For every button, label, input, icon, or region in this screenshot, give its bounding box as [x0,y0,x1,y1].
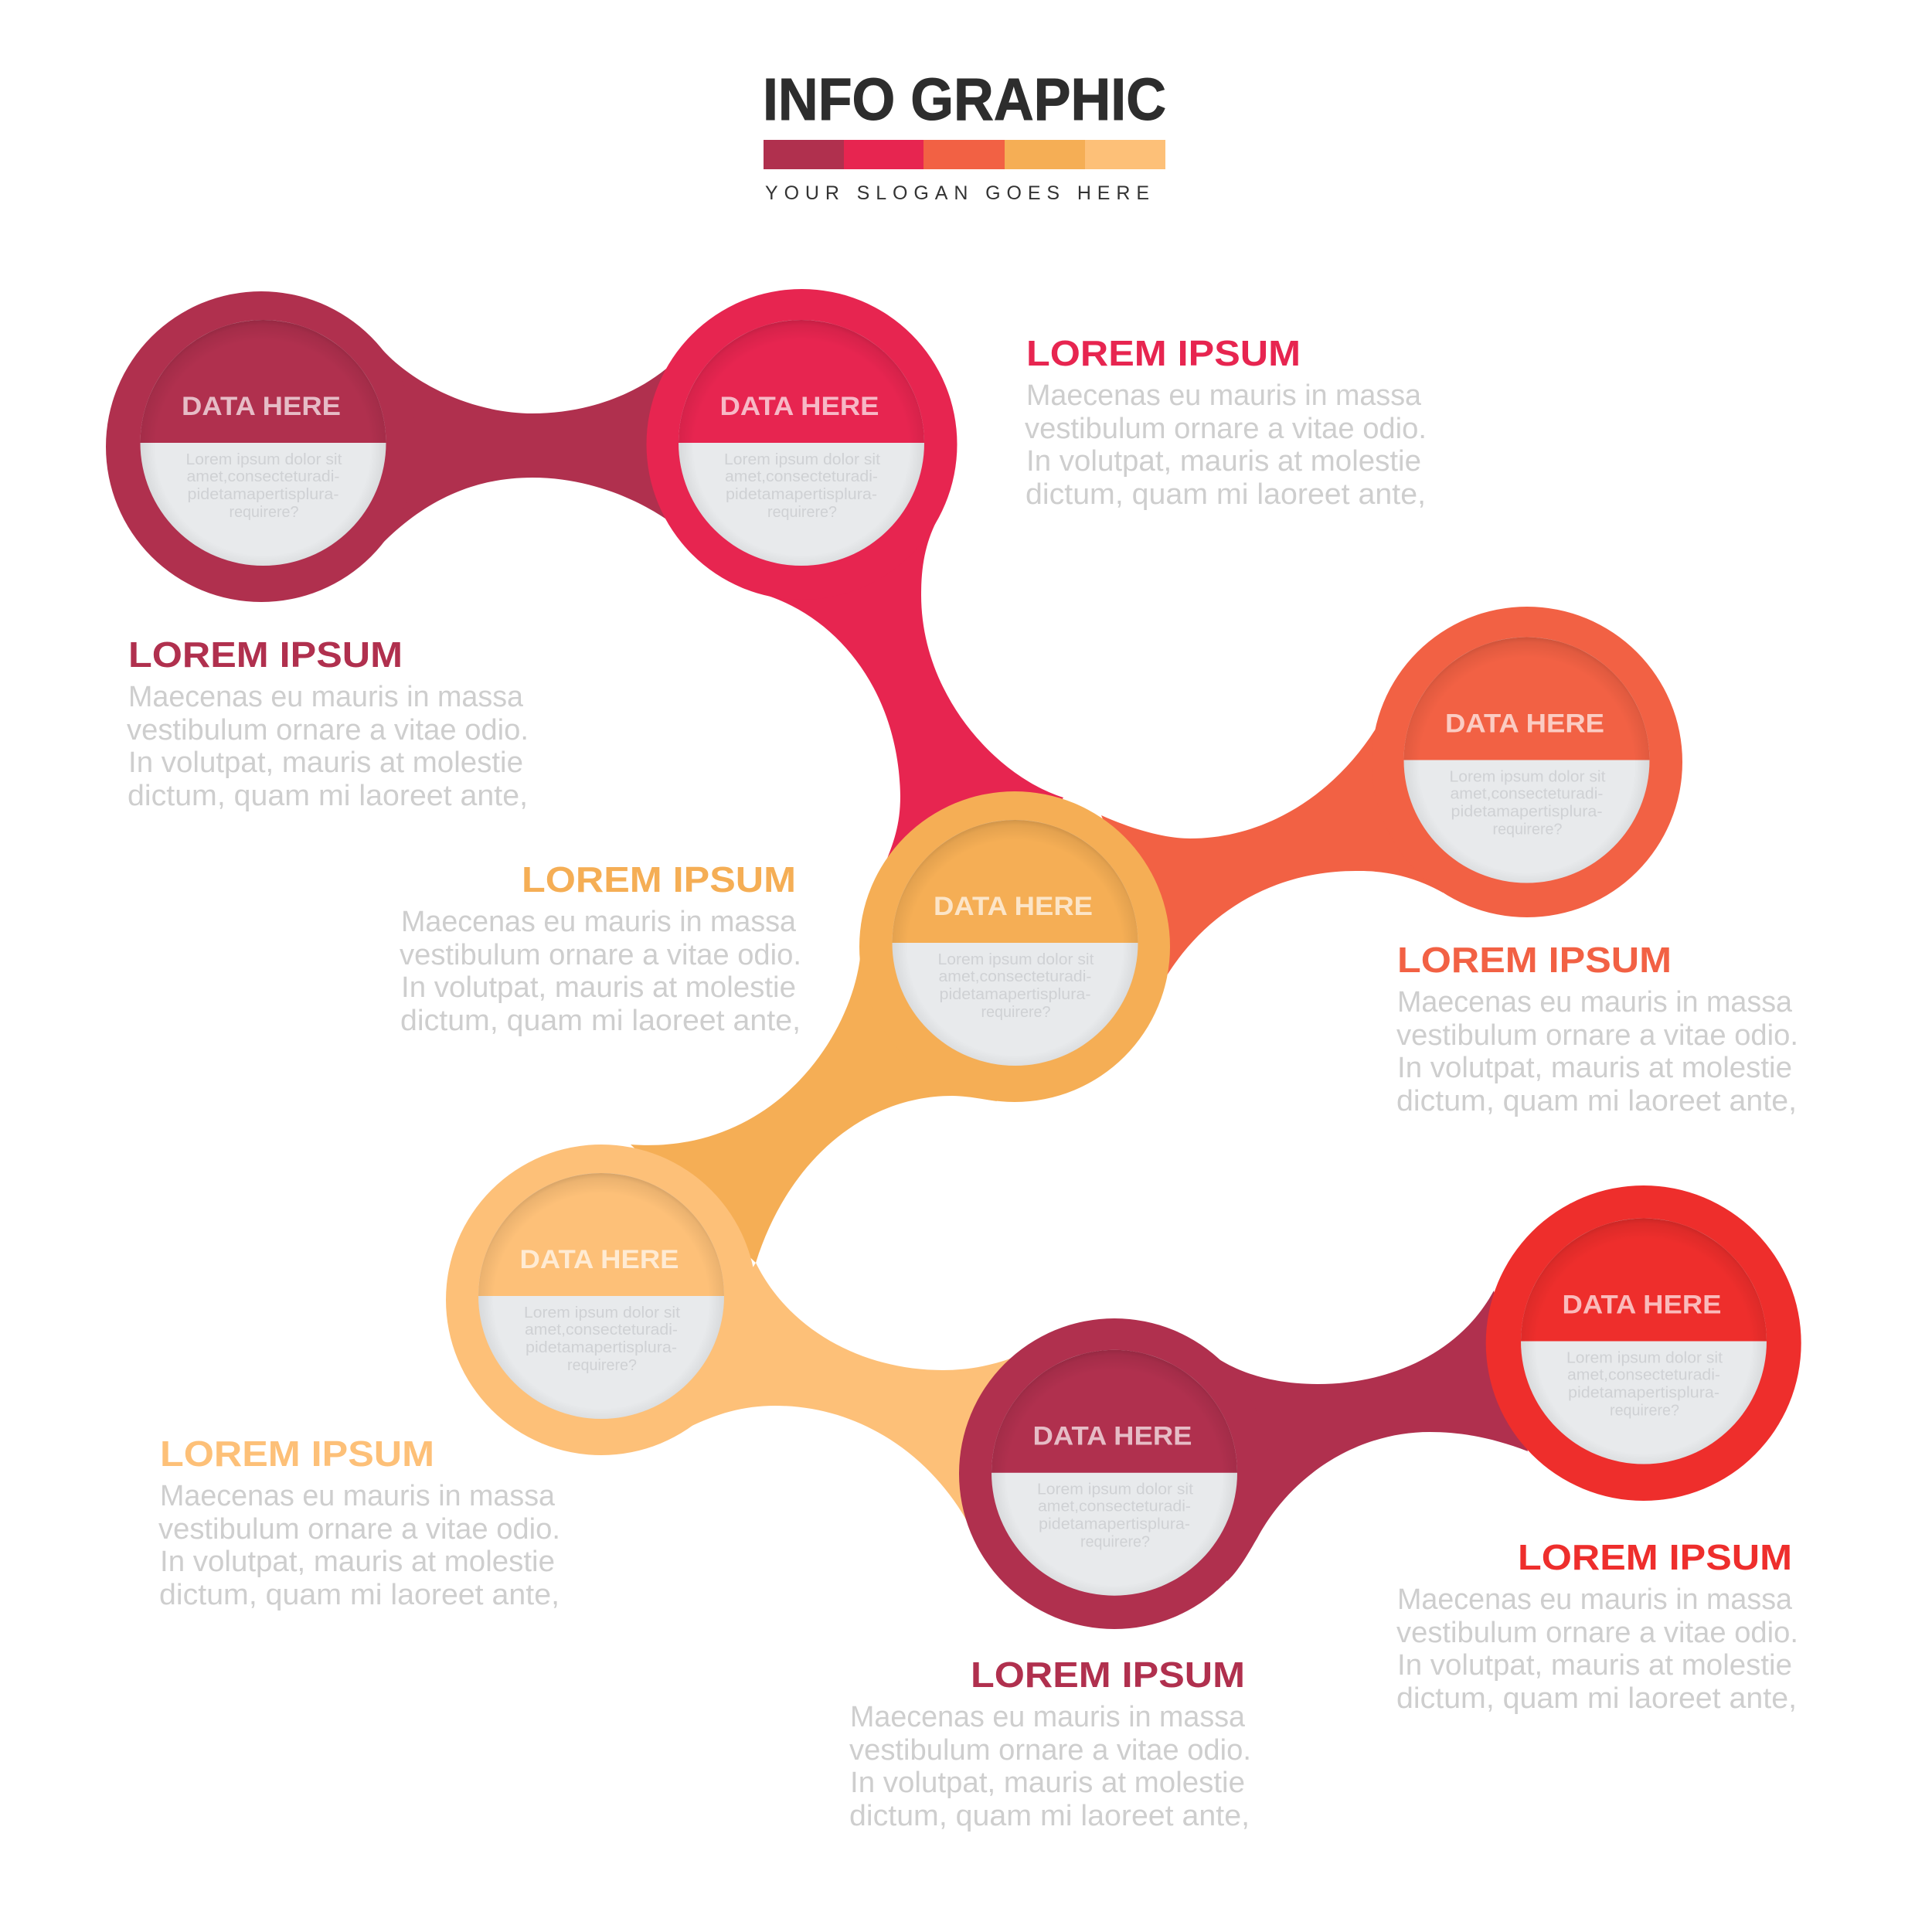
text block: step 3: Maecenas eu mauris in massa [1397,986,1793,1019]
node: step 2: pidetamapertisplura- [726,486,877,503]
text block: step 4 [400,859,801,1037]
text block: step 4: dictum, quam mi laoreet ante, [400,1005,801,1037]
connector: step 5 to step 6 [641,1263,1012,1519]
node: step 1: DATA HERE [182,392,341,421]
text block: step 4: Maecenas eu mauris in massa [401,906,797,938]
text block: step 7: Maecenas eu mauris in massa [1397,1583,1793,1616]
node: step 4: pidetamapertisplura- [940,986,1091,1003]
connector: step 6 to step 7 [1144,1291,1528,1581]
node: step 1: requirere? [229,504,298,521]
text block: step 6: In volutpat, mauris at molestie [850,1767,1245,1799]
node: step 4: Lorem ipsum dolor sit [938,951,1094,968]
text block: step 3: vestibulum ornare a vitae odio. [1396,1019,1798,1052]
text block: step 4: In volutpat, mauris at molestie [401,971,796,1004]
text block: step 1: LOREM IPSUM [128,634,403,675]
text block: step 3: In volutpat, mauris at molestie [1397,1052,1792,1084]
text block: step 5: vestibulum ornare a vitae odio. [158,1513,560,1546]
connector: step 4 to step 3 [1101,723,1468,975]
text block: step 4: LOREM IPSUM [522,859,796,900]
node: step 6: pidetamapertisplura- [1039,1516,1190,1533]
colour bar [764,140,1165,169]
text block: step 3: LOREM IPSUM [1397,940,1672,980]
node: step 5: amet,consecteturadi- [525,1321,678,1338]
text block: step 3: dictum, quam mi laoreet ante, [1396,1085,1797,1117]
node: step 7: amet,consecteturadi- [1567,1366,1720,1383]
connector: step 4 to step 5 [631,951,997,1263]
text block: step 2: dictum, quam mi laoreet ante, [1026,478,1426,511]
text block: step 7: In volutpat, mauris at molestie [1397,1649,1792,1682]
text block: step 1 [127,634,529,812]
node: step 6: requirere? [1080,1534,1150,1551]
node: step 1: pidetamapertisplura- [187,486,338,503]
title: INFO GRAPHIC [763,66,1166,133]
node: step 1: amet,consecteturadi- [187,468,340,485]
text block: step 2: vestibulum ornare a vitae odio. [1025,413,1427,445]
node: step 6 [959,1318,1270,1629]
text block: step 2: In volutpat, mauris at molestie [1026,445,1421,478]
node: step 4: amet,consecteturadi- [938,968,1091,985]
text block: step 3 [1396,940,1798,1117]
node: step 1 [106,291,417,602]
node: step 5: requirere? [567,1357,637,1374]
node: step 7: DATA HERE [1563,1291,1722,1320]
node: step 3: amet,consecteturadi- [1450,785,1603,802]
node: step 4 [859,791,1170,1102]
node: step 3: DATA HERE [1445,709,1604,739]
text block: step 5: Maecenas eu mauris in massa [160,1480,556,1512]
node: step 2 [646,289,957,600]
text block: step 5: LOREM IPSUM [160,1434,434,1474]
node: step 7: pidetamapertisplura- [1568,1385,1719,1402]
text block: step 6: LOREM IPSUM [971,1655,1245,1695]
node: step 1: Lorem ipsum dolor sit [185,451,342,468]
text block: step 2: Maecenas eu mauris in massa [1026,379,1422,412]
text block: step 6 [849,1655,1251,1832]
slogan: YOUR SLOGAN GOES HERE [765,182,1149,204]
text block: step 5: In volutpat, mauris at molestie [160,1546,555,1578]
node: step 7: Lorem ipsum dolor sit [1566,1349,1723,1366]
node: step 4: DATA HERE [934,892,1093,921]
text block: step 5: dictum, quam mi laoreet ante, [159,1579,560,1611]
text block: step 7: LOREM IPSUM [1518,1537,1792,1577]
text block: step 5 [158,1434,560,1611]
text block: step 1: Maecenas eu mauris in massa [128,681,524,713]
text block: step 1: dictum, quam mi laoreet ante, [128,780,528,812]
node: step 7 [1486,1185,1801,1501]
text block: step 1: vestibulum ornare a vitae odio. [127,714,529,747]
text block: step 2: LOREM IPSUM [1026,333,1301,373]
node: step 3 [1372,607,1682,917]
node: step 2: amet,consecteturadi- [725,468,878,485]
text block: step 6: dictum, quam mi laoreet ante, [849,1800,1250,1832]
node: step 3: pidetamapertisplura- [1451,804,1603,821]
text block: step 6: vestibulum ornare a vitae odio. [849,1734,1251,1767]
node: step 2: DATA HERE [720,392,879,421]
node: step 3: requirere? [1493,821,1563,838]
text block: step 7 [1396,1537,1798,1715]
node: step 5 [446,1145,757,1455]
node: step 6: Lorem ipsum dolor sit [1037,1481,1193,1498]
node: step 6: DATA HERE [1032,1422,1192,1451]
node: step 5: DATA HERE [519,1245,679,1274]
connector: step 2 to step 4 [675,386,1063,889]
node: step 5: pidetamapertisplura- [526,1339,677,1356]
text block: step 2 [1025,333,1427,511]
connector: step 1 to step 2 [309,345,696,549]
node: step 4: requirere? [981,1004,1051,1021]
node: step 2: Lorem ipsum dolor sit [724,451,880,468]
text block: step 6: Maecenas eu mauris in massa [850,1701,1246,1733]
node: step 5: Lorem ipsum dolor sit [524,1304,680,1321]
node: step 3: Lorem ipsum dolor sit [1450,768,1606,785]
node: step 6: amet,consecteturadi- [1038,1498,1191,1515]
node: step 7: requirere? [1610,1402,1679,1419]
text block: step 7: vestibulum ornare a vitae odio. [1396,1617,1798,1649]
text block: step 1: In volutpat, mauris at molestie [128,747,523,779]
text block: step 7: dictum, quam mi laoreet ante, [1396,1682,1797,1715]
node: step 2: requirere? [767,504,837,521]
text block: step 4: vestibulum ornare a vitae odio. [400,939,801,971]
